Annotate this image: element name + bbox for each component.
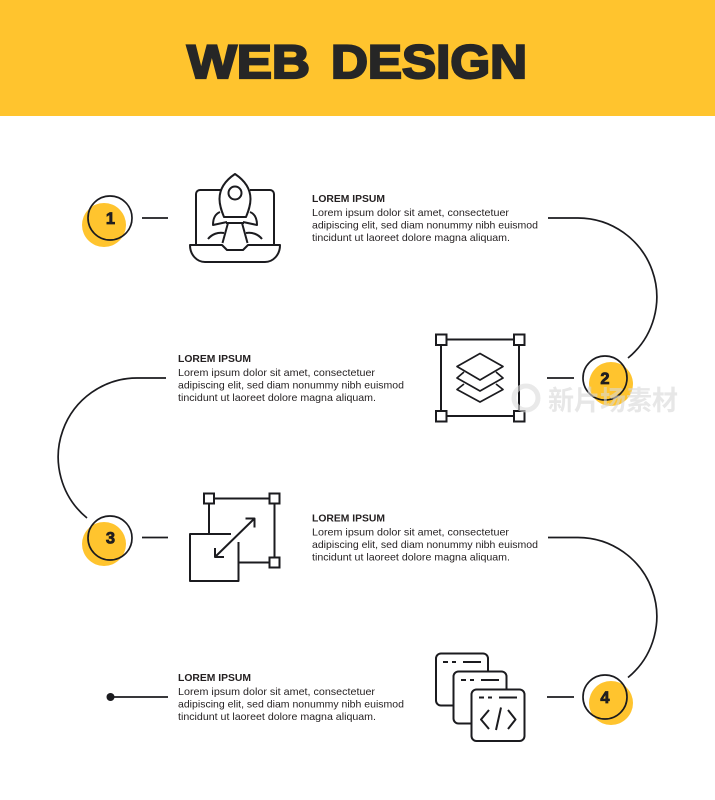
text block 1: LOREM IPSUM (312, 193, 385, 205)
text block 2: adipiscing elit, sed diam nonummy nibh euismod (178, 380, 404, 392)
text block 3 (312, 512, 538, 564)
step 2 badge (547, 356, 633, 406)
text block 1: Lorem ipsum dolor sit amet, consectetuer (312, 207, 510, 219)
text block 1: adipiscing elit, sed diam nonummy nibh euismod (312, 220, 538, 232)
text block 3: adipiscing elit, sed diam nonummy nibh euismod (312, 539, 538, 551)
icon: resize arrows between squares (190, 494, 280, 581)
text block 4: adipiscing elit, sed diam nonummy nibh euismod (178, 698, 404, 710)
icon: layers in selection frame (436, 334, 524, 422)
title (187, 35, 527, 88)
text block 1 (312, 193, 538, 244)
step 4 badge (547, 675, 633, 725)
step 1 badge: 1 (106, 210, 115, 228)
icon: rocket launching from laptop (190, 174, 280, 262)
connector arc 1 to 2 (548, 218, 657, 358)
step 3 badge (82, 516, 168, 566)
text block 2: Lorem ipsum dolor sit amet, consectetuer (178, 367, 376, 379)
title: WEB (187, 35, 310, 88)
step 2 badge: 2 (600, 370, 610, 388)
watermark: 新片场素材 (548, 386, 678, 416)
header banner (0, 0, 715, 116)
text block 4: LOREM IPSUM (178, 672, 251, 684)
text block 3: LOREM IPSUM (312, 512, 385, 524)
icon: stacked code windows (436, 654, 524, 741)
step 1 badge (82, 196, 168, 247)
text block 2 (178, 353, 404, 404)
text block 3: tincidunt ut laoreet dolore magna aliquam. (312, 552, 510, 564)
text block 2: tincidunt ut laoreet dolore magna aliquam. (178, 392, 376, 404)
text block 4 (178, 672, 404, 723)
text block 3: Lorem ipsum dolor sit amet, consectetuer (312, 526, 510, 538)
step 3 badge: 3 (106, 530, 115, 548)
text block 4: tincidunt ut laoreet dolore magna aliquam. (178, 711, 376, 723)
text block 4: Lorem ipsum dolor sit amet, consectetuer (178, 686, 376, 698)
end point marker (106, 693, 168, 701)
connector arc 3 to 4 (548, 538, 657, 678)
title: DESIGN (331, 35, 527, 88)
connector arc 2 to 3 (58, 378, 166, 518)
text block 1: tincidunt ut laoreet dolore magna aliquam. (312, 232, 510, 244)
step 4 badge: 4 (600, 689, 610, 707)
text block 2: LOREM IPSUM (178, 353, 251, 365)
